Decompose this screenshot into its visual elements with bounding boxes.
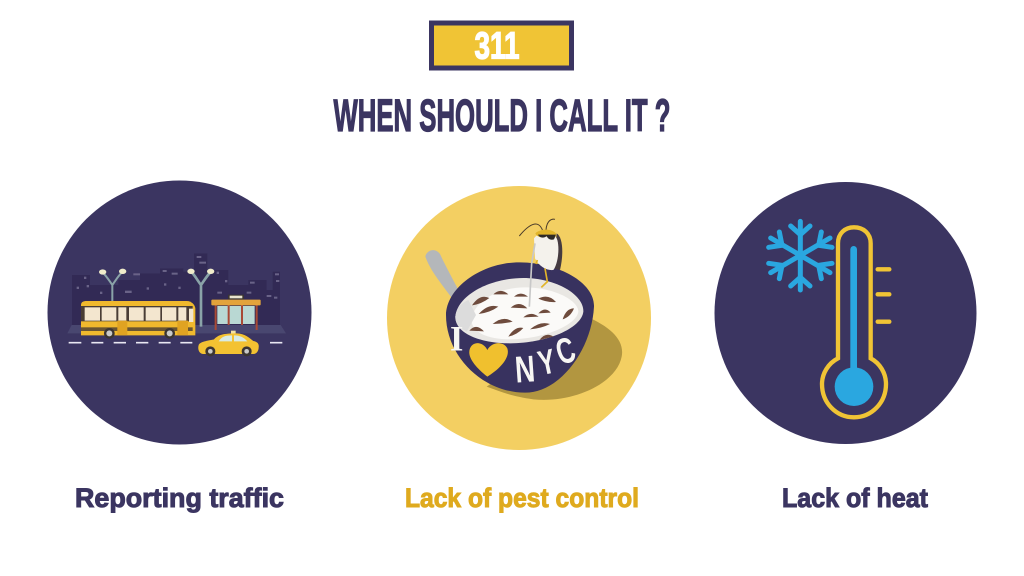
panel: reporting traffic — [48, 180, 312, 444]
taxi — [198, 331, 259, 356]
icon: snowflake — [769, 221, 832, 290]
bowl shadow — [487, 317, 622, 400]
badge: 311 — [432, 23, 572, 68]
bowl lettering: C — [551, 328, 580, 373]
cockroach — [519, 219, 562, 307]
bus stop shelter — [211, 295, 261, 330]
label: reporting traffic: Reporting traffic — [75, 483, 284, 513]
sidewalk — [67, 325, 286, 333]
road dashes — [69, 340, 282, 345]
circle background: pest — [387, 186, 651, 450]
panel: lack of pest control — [387, 186, 651, 450]
city skyline — [72, 253, 280, 327]
antennae — [519, 219, 555, 236]
bowl lettering: Y — [535, 343, 559, 383]
icon: heart — [469, 343, 508, 377]
panel: lack of heat — [714, 182, 976, 444]
legs and fishing spoon — [529, 243, 535, 307]
label: lack of heat: Lack of heat — [782, 483, 928, 513]
shell — [553, 233, 562, 270]
label: lack of pest control: Lack of pest control — [405, 483, 639, 513]
thermometer outline — [822, 227, 886, 417]
badge: 311: 311 — [474, 26, 520, 68]
illustration: cereal bowl with cockroach — [425, 219, 622, 400]
bowl lettering: N — [513, 347, 536, 391]
milk — [455, 278, 583, 343]
bowl lettering: I — [450, 319, 463, 359]
spoon — [425, 250, 467, 310]
scale ticks — [878, 269, 889, 322]
mercury — [835, 249, 873, 406]
body — [534, 233, 558, 270]
title: WHEN SHOULD I CALL IT ? — [334, 90, 670, 141]
circle background: heat — [714, 182, 976, 444]
bowl — [446, 262, 594, 393]
cereal pieces — [469, 291, 574, 340]
sunglasses and head — [535, 230, 556, 238]
illustration: city street with bus and taxi — [67, 253, 286, 356]
circle background: traffic — [48, 180, 312, 444]
bowl lettering — [450, 319, 580, 391]
street lamp right — [187, 269, 214, 327]
illustration: thermometer and snowflake — [769, 221, 889, 417]
street lamp left — [99, 269, 126, 302]
bus — [81, 301, 195, 339]
